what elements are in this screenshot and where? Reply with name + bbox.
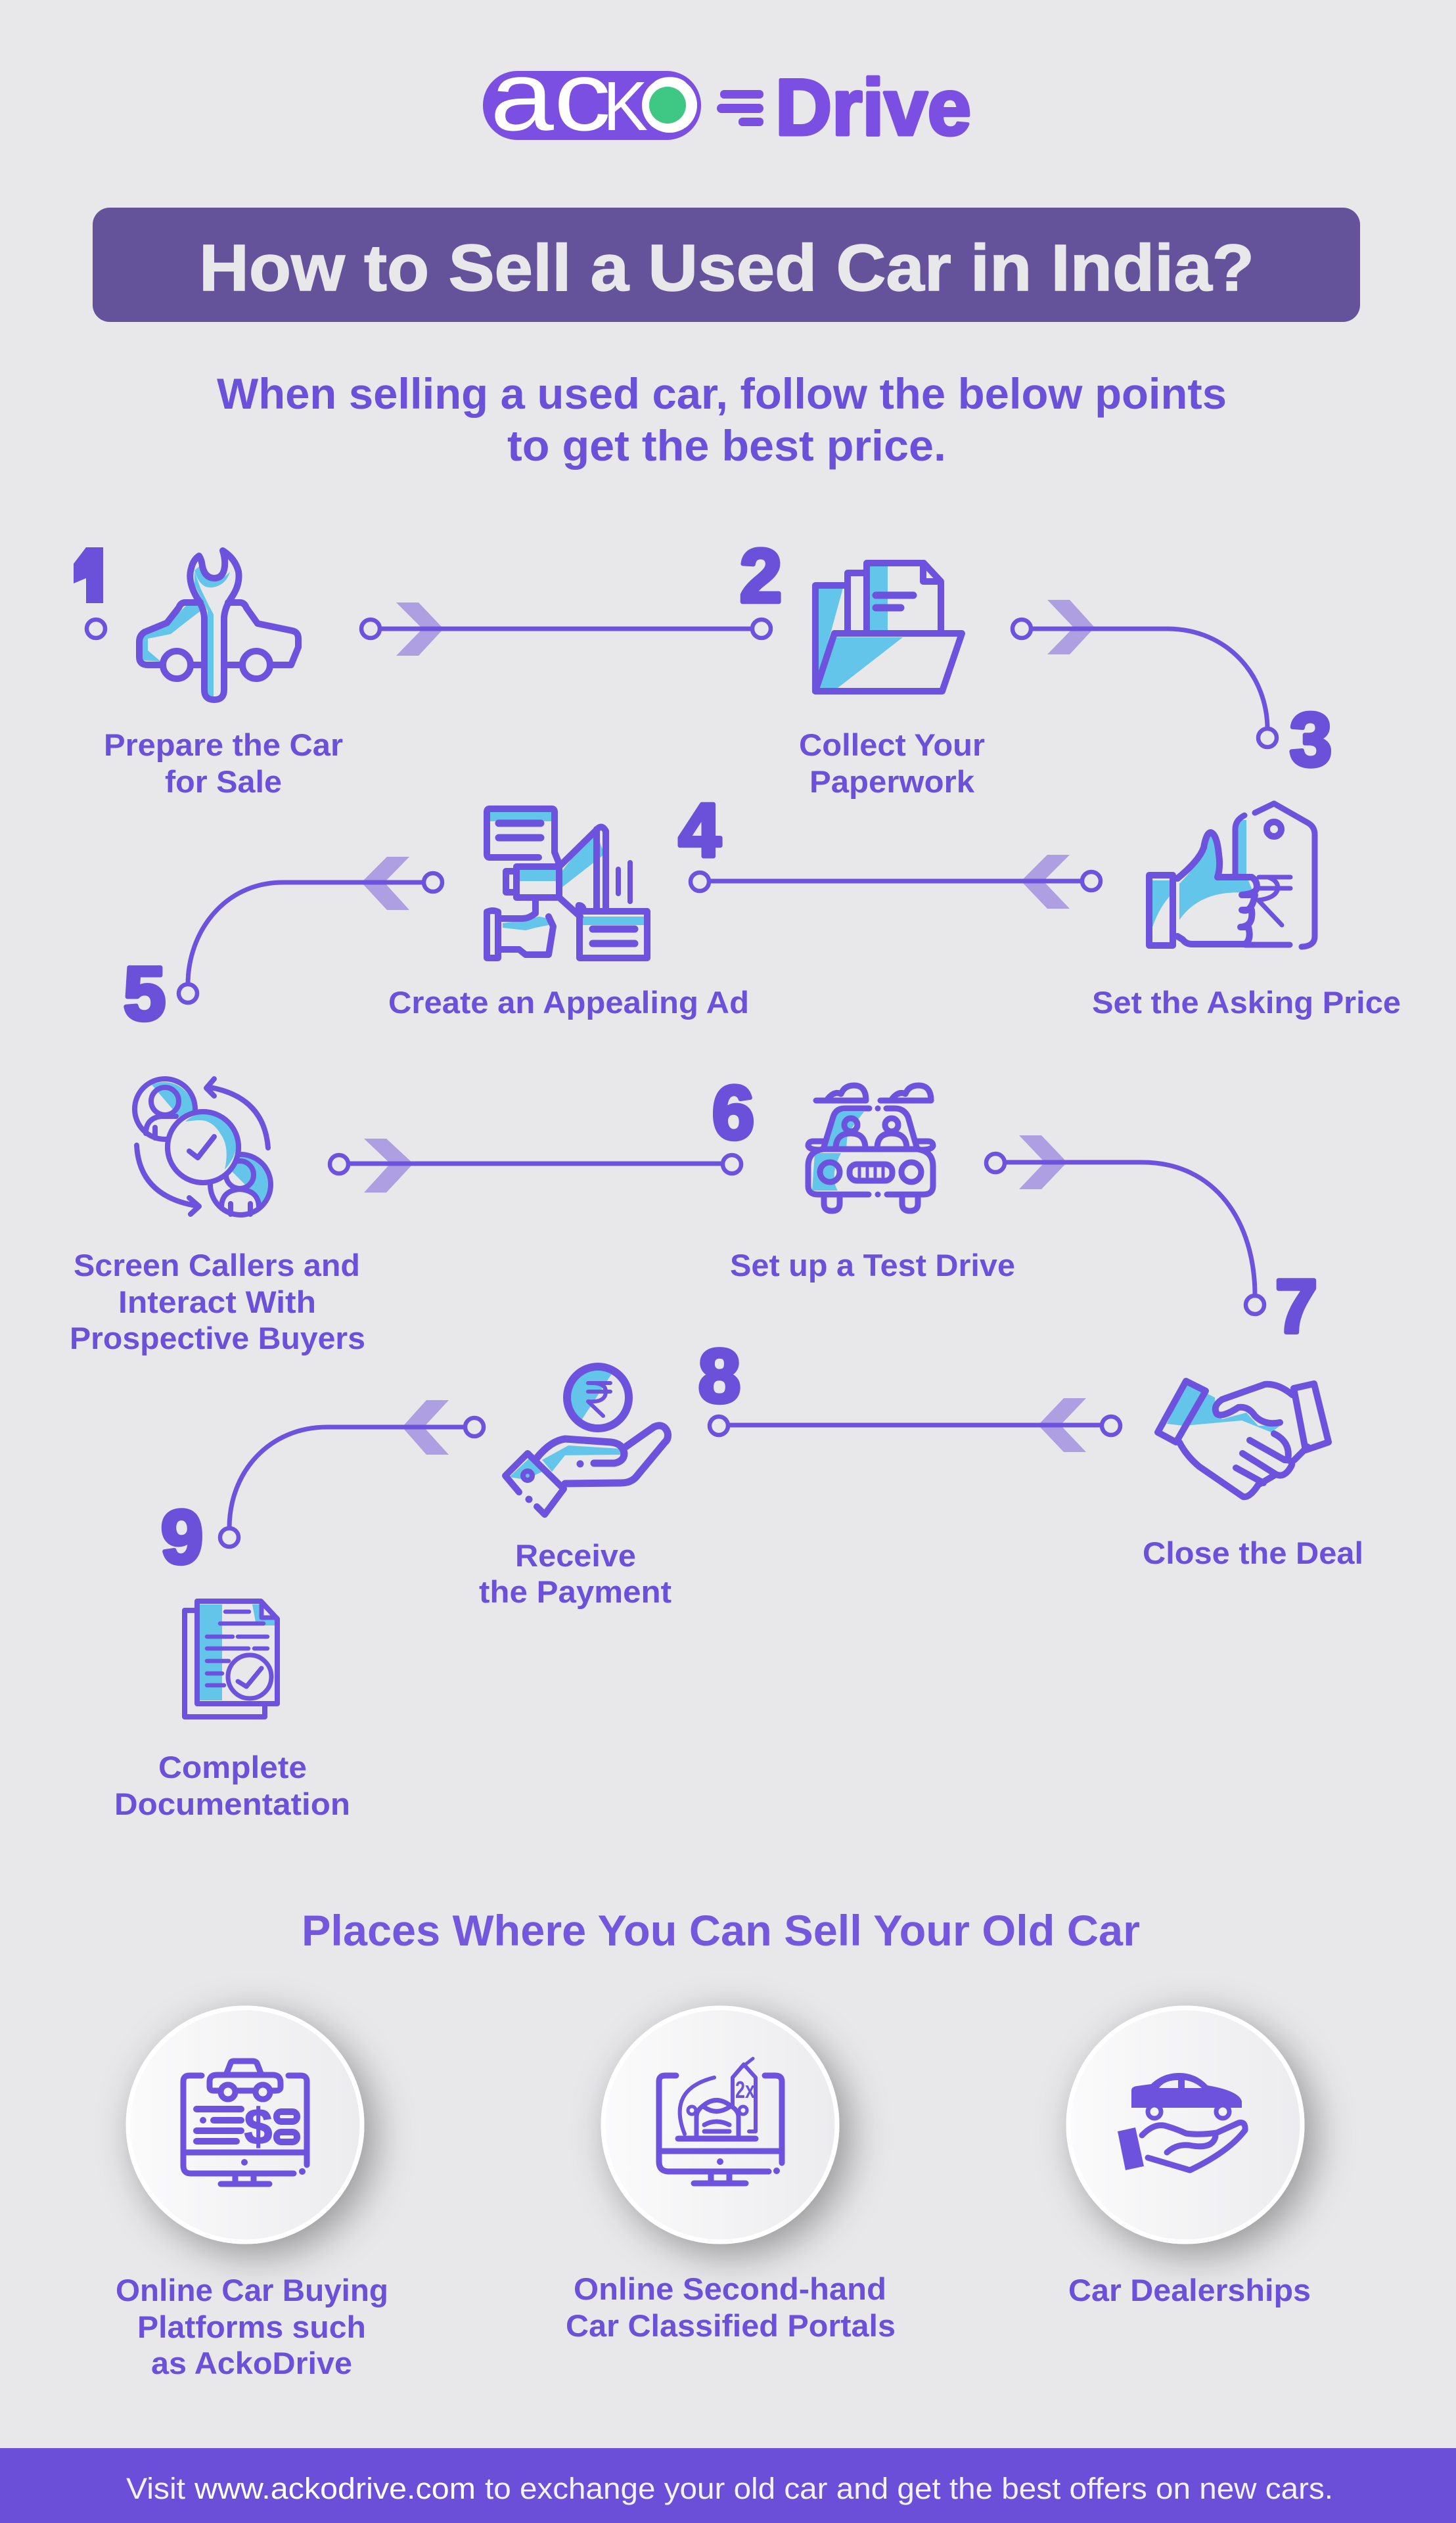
number 7: 7	[1275, 1265, 1317, 1349]
footer bar: Visit	[126, 2472, 186, 2505]
label: Car Classified Portals	[566, 2308, 896, 2343]
label: Create an Appealing Ad	[388, 985, 749, 1020]
title banner	[93, 208, 1360, 322]
subtitle: to get the best price.	[507, 421, 946, 470]
label	[116, 2273, 388, 2380]
icon: car with passengers and clouds	[808, 1085, 933, 1211]
label	[104, 727, 343, 799]
label: Complete	[158, 1750, 307, 1784]
icon: thumbs up with price tag	[1149, 804, 1315, 947]
title banner: How to Sell a Used Car in India?	[199, 231, 1254, 305]
icon glyph: dollar: $	[244, 2099, 272, 2155]
connector 8 to 9	[220, 1400, 484, 1547]
label: Set up a Test Drive	[730, 1248, 1015, 1283]
footer bar: www.ackodrive.com	[194, 2472, 476, 2505]
icon: car and wrench	[139, 551, 298, 700]
step 7: Close the Deal	[1143, 1265, 1363, 1570]
label: Platforms such	[137, 2309, 366, 2344]
logo speed lines	[717, 90, 763, 126]
heading: places to sell: Places Where You Can Sell Your Old Car	[302, 1906, 1140, 1955]
number 3: 3	[1290, 698, 1332, 782]
label	[70, 1248, 365, 1355]
number 2: 2	[740, 534, 782, 618]
icon: buyers with check and arrows	[135, 1079, 271, 1215]
step 1: Prepare the Car for Sale	[64, 535, 343, 799]
logo pill: acko: ac	[490, 41, 611, 151]
number 6: 6	[712, 1071, 754, 1155]
number 5: 5	[124, 952, 166, 1036]
connector 5 to 6	[330, 1139, 741, 1193]
label	[799, 727, 985, 799]
logo pill: acko: K	[603, 68, 648, 145]
disc	[603, 2008, 837, 2242]
number 8: 8	[698, 1334, 740, 1419]
label: Close the Deal	[1143, 1535, 1363, 1570]
label	[479, 1538, 671, 1609]
footer bar: to exchange your old car and get the best offers on new cars.	[485, 2472, 1333, 2505]
label	[566, 2271, 896, 2343]
footer bar	[0, 2448, 1456, 2523]
icon text: 2x: 2x	[735, 2076, 755, 2103]
step 4: Create an Appealing Ad	[388, 788, 749, 1020]
icon: monitor with car and price tag	[659, 2058, 782, 2183]
logo: AckoDrive	[483, 41, 971, 152]
logo pill: acko: o	[643, 41, 696, 151]
icon: monitor with car listing	[183, 2061, 307, 2184]
icon: coin over hand	[505, 1367, 668, 1514]
connector 4 to 5	[179, 857, 442, 1003]
label: Set the Asking Price	[1092, 985, 1401, 1020]
label	[114, 1750, 350, 1821]
label: the Payment	[479, 1574, 671, 1609]
icon: signed document	[185, 1601, 277, 1717]
number 4: 4	[679, 788, 721, 873]
logo pill: acko	[483, 41, 701, 151]
step 5: Screen Callers and Interact With Prospective Buyers	[70, 952, 365, 1355]
step 2: Collect Your Paperwork	[740, 534, 985, 799]
label: Online Second-hand	[574, 2271, 886, 2306]
label: Documentation	[114, 1786, 350, 1821]
label: Car Dealerships	[1068, 2273, 1311, 2307]
number 1: 1	[74, 535, 115, 618]
icon: megaphone with ad bubbles	[487, 809, 648, 958]
connector 6 to 7	[986, 1135, 1264, 1314]
label: Prepare the Car	[104, 727, 343, 762]
disc	[1068, 2008, 1302, 2242]
label: for Sale	[165, 764, 282, 799]
label: as AckoDrive	[151, 2346, 352, 2380]
step 6: Set up a Test Drive	[712, 1071, 1015, 1283]
label: Collect Your	[799, 727, 985, 762]
panel: online classified portals	[566, 2008, 896, 2343]
label: Paperwork	[809, 764, 975, 799]
label: Receive	[515, 1538, 636, 1573]
step 8: Receive the Payment	[479, 1334, 740, 1609]
panel: online car buying platforms	[116, 2008, 388, 2380]
icon: folder with documents	[815, 563, 962, 691]
icon: handshake	[1158, 1381, 1329, 1497]
connector 1 to 2	[361, 602, 771, 656]
step 3: Set the Asking Price	[1092, 698, 1401, 1020]
number 1	[64, 535, 124, 618]
logo wordmark: Drive: Drive	[775, 62, 971, 152]
subtitle	[217, 369, 1227, 470]
subtitle: When selling a used car, follow the below points	[217, 369, 1227, 418]
connector 2 to 3	[1012, 600, 1277, 747]
label: Prospective Buyers	[70, 1321, 365, 1355]
disc	[128, 2008, 362, 2242]
connector 3 to 4	[691, 855, 1101, 909]
label: Interact With	[118, 1284, 316, 1319]
panel: car dealerships	[1068, 2008, 1311, 2307]
icon: car on hand	[1118, 2073, 1245, 2170]
marker 1	[87, 620, 105, 638]
connector 7 to 8	[710, 1398, 1120, 1452]
label: Screen Callers and	[74, 1248, 360, 1283]
number 9: 9	[161, 1495, 203, 1580]
label: Online Car Buying	[116, 2273, 388, 2307]
step 9: Complete Documentation	[114, 1495, 350, 1821]
